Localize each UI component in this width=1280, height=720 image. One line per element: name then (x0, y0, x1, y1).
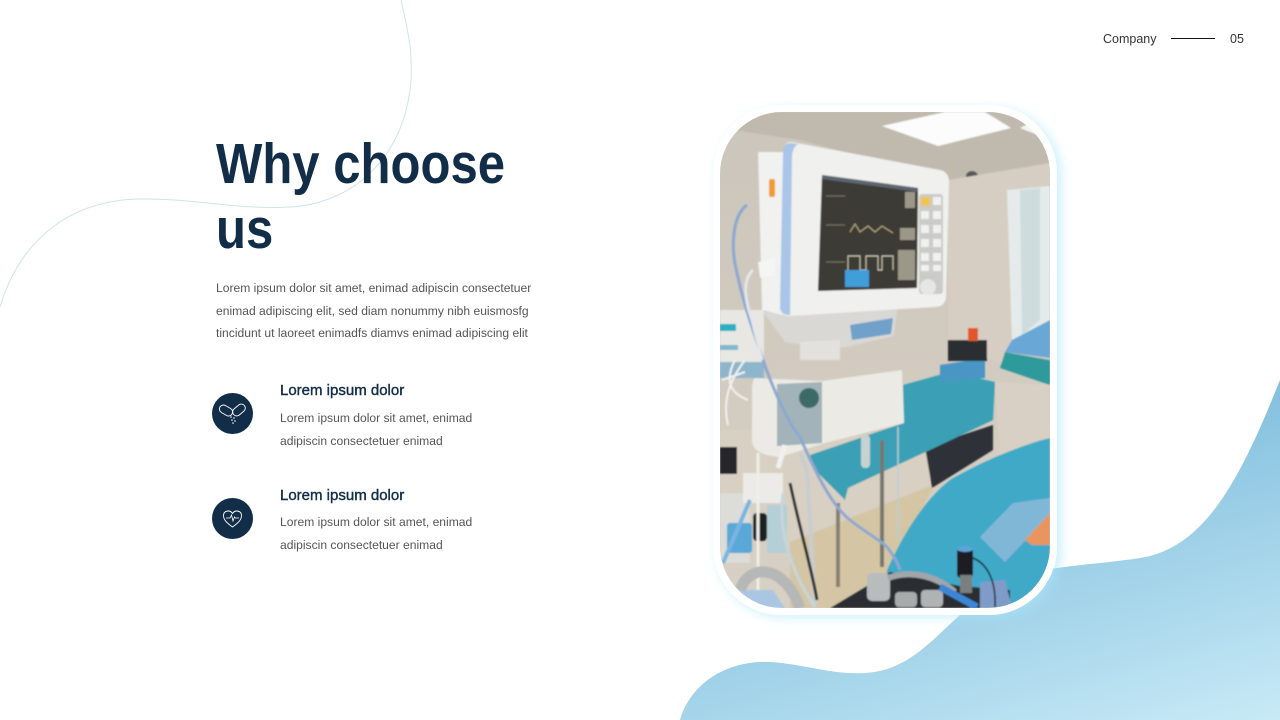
blue drape (885, 438, 1050, 608)
back table green and blue cloth (1000, 352, 1050, 385)
window (1007, 186, 1050, 350)
lower left equipment (720, 447, 737, 474)
photo: operating room monitor in rounded frame (712, 104, 1066, 623)
buttons (919, 194, 943, 294)
feature text: Lorem ipsum dolor sit amet, enimad (280, 515, 472, 529)
header: company and page number: Company (1103, 32, 1156, 46)
ceiling and wall (720, 112, 1050, 180)
intro text block: tincidunt ut laoreet enimadfs diamvs enimad adipiscing elit (216, 326, 528, 340)
feature text (280, 515, 472, 552)
feature 1 (212, 382, 472, 448)
header: company and page number: 05 (1230, 32, 1244, 46)
shelf and left wires (720, 310, 764, 362)
intro text block: enimad adipiscing elit, sed diam nonummy nibh euismosfg (216, 304, 529, 318)
side module (758, 152, 785, 315)
feature text (280, 411, 472, 448)
teal table drape (810, 372, 995, 500)
icon: heart pulse (212, 498, 253, 539)
black box and red item (948, 340, 987, 361)
lower wall and floor (720, 430, 930, 540)
tubes (733, 205, 900, 570)
intro text block (216, 281, 532, 340)
anaesthesia machine (830, 572, 1010, 608)
feature heading: Lorem ipsum dolor (280, 382, 404, 399)
title: us (216, 197, 273, 261)
title (216, 132, 505, 261)
dark table shadow (925, 425, 993, 488)
feature text: adipiscin consectetuer enimad (280, 434, 443, 448)
screen (818, 175, 918, 291)
feature heading: Lorem ipsum dolor (280, 487, 404, 504)
feature text: adipiscin consectetuer enimad (280, 538, 443, 552)
title: Why choose (216, 132, 505, 196)
feature text: Lorem ipsum dolor sit amet, enimad (280, 411, 472, 425)
stand poles (880, 440, 884, 567)
monitor arm (763, 310, 897, 350)
pump box (752, 370, 904, 457)
intro text block: Lorem ipsum dolor sit amet, enimad adipiscin consectetuer (216, 281, 531, 295)
monitor body (780, 142, 949, 316)
icon: capsules (212, 393, 253, 434)
header: company and page number (1103, 32, 1244, 46)
hose (738, 589, 785, 608)
feature 2 (212, 487, 472, 552)
